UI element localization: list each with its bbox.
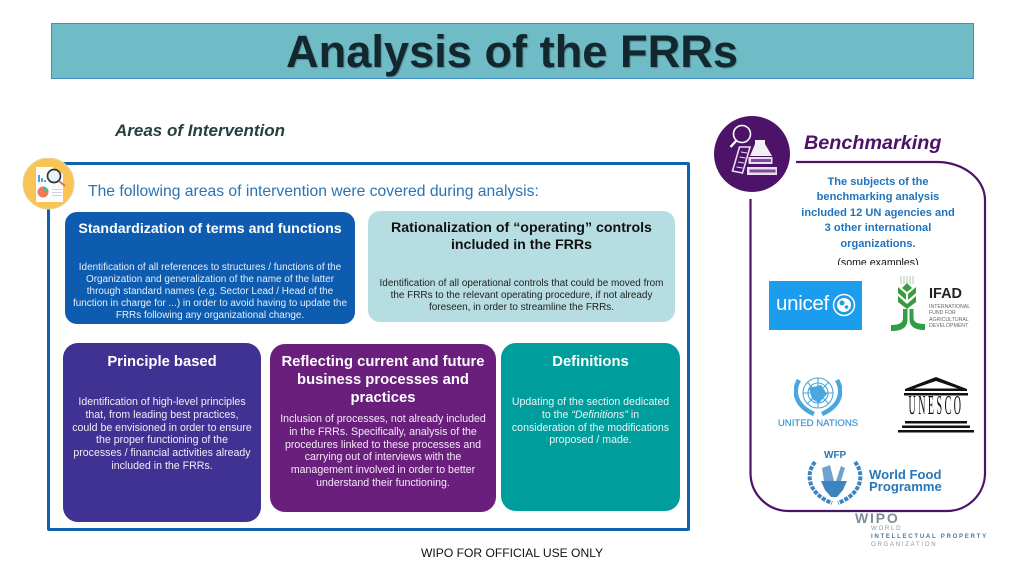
card body: Identification of all references to structures / functions of the	[79, 262, 341, 273]
benchmarking text	[801, 176, 955, 250]
WFP name	[869, 467, 942, 494]
WIPO full name: WORLD	[871, 525, 902, 532]
card body: the FRRs to the relevant operating procedure, if not already	[391, 290, 652, 301]
card: rationalization	[368, 211, 675, 322]
card body: Updating of the section dedicated	[512, 396, 669, 408]
card body: Identification of all operational controls that could be moved from	[380, 278, 663, 289]
WIPO wordmark: WIPO	[855, 510, 900, 526]
card heading: included in the FRRs	[451, 237, 592, 253]
card: principle based	[63, 343, 261, 522]
card body: processes / financial activities already	[73, 447, 251, 459]
card body: Inclusion of processes, not already included	[280, 413, 486, 425]
logo: WIPO	[855, 510, 988, 548]
title: Analysis of the FRRs	[286, 26, 738, 77]
logo: unicef: unicef	[776, 292, 829, 315]
card body: consideration of the modifications	[512, 422, 669, 434]
IFAD wordmark: IFAD	[929, 286, 962, 302]
WFP name: Programme	[869, 479, 942, 494]
footer note: WIPO FOR OFFICIAL USE ONLY	[421, 546, 603, 560]
card body: included in the FRRs.	[111, 460, 213, 472]
card body: understand their functioning.	[316, 477, 450, 489]
heading: benchmarking: Benchmarking	[804, 132, 941, 154]
panel frame: areas of intervention	[47, 162, 690, 531]
icon: benchmarking	[714, 116, 790, 192]
card body: Organization and generalization of the name of the latter	[86, 274, 334, 285]
card body: procedures linked to these processes and	[285, 439, 481, 451]
card body: carrying out of interviews with the	[305, 451, 461, 463]
card body: proposed / made.	[549, 434, 632, 446]
card body: could be envisioned in order to ensure	[72, 422, 252, 434]
IFAD full name: AGRICULTURAL	[929, 317, 969, 323]
benchmarking text: included 12 UN agencies and	[801, 207, 955, 219]
card body	[72, 396, 252, 472]
WFP name: World Food	[869, 467, 941, 482]
card heading: Definitions	[552, 354, 629, 370]
benchmarking text: 3 other international	[825, 222, 931, 234]
benchmarking text: organizations.	[840, 238, 916, 250]
card body: the proper functioning of the	[96, 434, 228, 446]
card body	[280, 413, 486, 489]
logo: united nations	[778, 378, 858, 429]
logo: UNESCO	[898, 377, 974, 432]
IFAD full name: FUND FOR	[929, 310, 956, 316]
card heading: practices	[350, 390, 415, 406]
card body: to the “Definitions” in	[542, 409, 639, 421]
UN wordmark: UNITED NATIONS	[778, 418, 858, 429]
WIPO full name: INTELLECTUAL PROPERTY	[871, 533, 988, 540]
WFP label: WFP	[824, 450, 846, 461]
card body: in the FRRs. Specifically, analysis of the	[289, 426, 477, 438]
card body: foreseen, in order to streamline the FRRs.	[429, 302, 614, 313]
card: reflecting current and future	[270, 344, 496, 512]
benchmarking text: The subjects of the	[827, 176, 929, 188]
card body: management involved in order to better	[291, 464, 475, 476]
card body: that, from leading best practices,	[85, 409, 239, 421]
heading: areas of intervention: Areas of Intervention	[115, 121, 285, 140]
IFAD full name	[929, 304, 970, 329]
benchmarking text: benchmarking analysis	[817, 191, 939, 203]
card body: function in charge for ...) in order to avoid having to update the	[73, 298, 347, 309]
title banner	[51, 23, 974, 79]
card body: through standard names (e.g. Sector Lead / Head of the	[87, 286, 333, 297]
panel frame: benchmarking	[749, 160, 986, 512]
card heading: Standardization of terms and functions	[78, 221, 342, 237]
logo: IFAD	[891, 276, 970, 331]
card body: Identification of high-level principles	[78, 396, 246, 408]
card body: FRRs following any organizational change.	[116, 310, 304, 321]
icon: report with magnifier	[22, 158, 74, 210]
card: standardization	[65, 212, 355, 324]
IFAD full name: DEVELOPMENT	[929, 323, 968, 329]
card heading: Rationalization of “operating” controls	[391, 220, 652, 236]
IFAD full name: INTERNATIONAL	[929, 304, 970, 310]
card heading	[281, 354, 485, 406]
card body	[512, 396, 669, 446]
logo: world food programme	[808, 450, 942, 505]
card body	[380, 278, 663, 313]
WIPO full name: ORGANIZATION	[871, 541, 937, 548]
logo: unicef	[769, 281, 862, 330]
card heading	[391, 220, 652, 253]
card heading: business processes and	[297, 372, 469, 388]
WIPO full name	[871, 525, 988, 548]
card: definitions	[501, 343, 680, 511]
card heading: Reflecting current and future	[281, 354, 485, 370]
card heading: Principle based	[107, 354, 217, 370]
card body	[73, 262, 347, 321]
intro text: The following areas of intervention were covered during analysis:	[88, 183, 539, 200]
